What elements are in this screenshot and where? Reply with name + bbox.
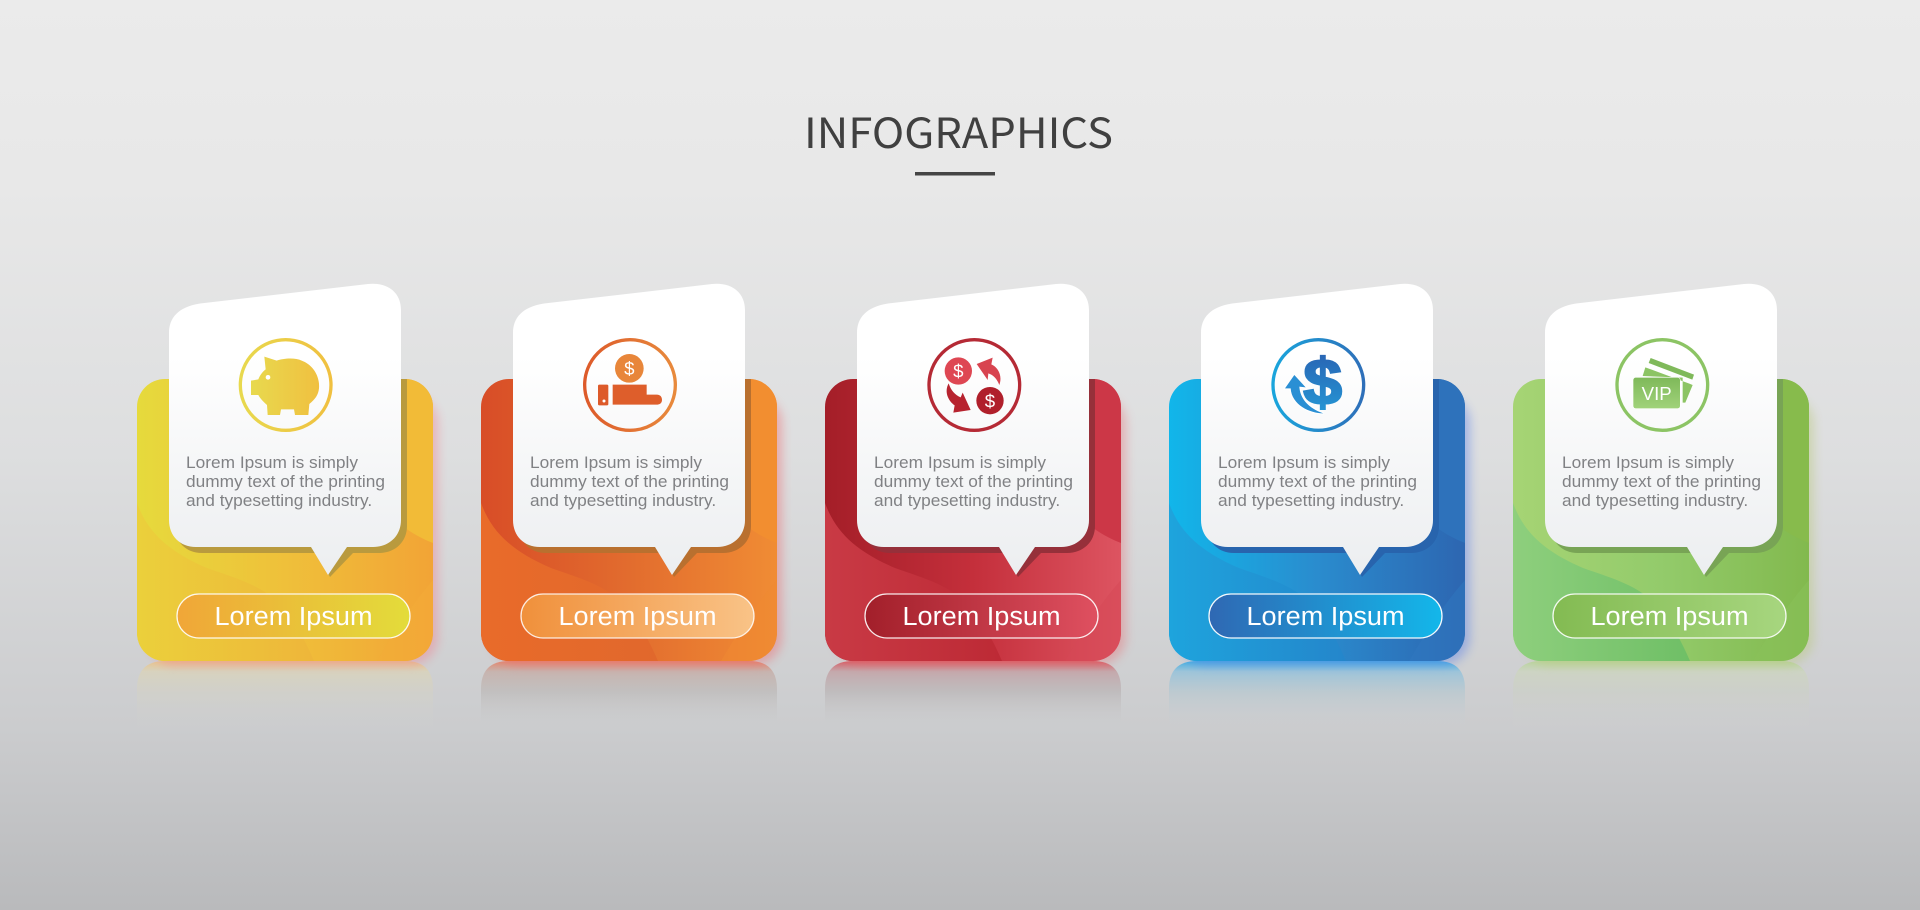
white speech card — [513, 284, 745, 575]
icon: currency exchange: $ — [953, 361, 964, 382]
icon: currency exchange — [929, 340, 1020, 430]
description text: and typesetting industry. — [1562, 492, 1748, 510]
label pill: Lorem Ipsum — [1590, 603, 1748, 631]
label pill: Lorem Ipsum — [558, 603, 716, 631]
description text: Lorem Ipsum is simply — [1218, 454, 1391, 472]
icon: piggy bank — [240, 340, 331, 430]
icon: hand holding coin — [585, 340, 675, 430]
label pill — [1553, 594, 1786, 638]
card glow — [491, 395, 782, 665]
title: INFOGRAPHICS — [804, 100, 1113, 160]
coloured base card — [137, 379, 433, 661]
label pill — [177, 594, 410, 638]
description text: and typesetting industry. — [530, 492, 716, 510]
description text: dummy text of the printing — [1218, 473, 1417, 491]
label pill — [1209, 594, 1442, 638]
reflection — [137, 661, 433, 731]
label pill: Lorem Ipsum — [214, 603, 372, 631]
reflection — [1513, 661, 1809, 731]
white speech card — [857, 284, 1089, 575]
coloured base card — [825, 379, 1121, 661]
description text: dummy text of the printing — [186, 473, 385, 491]
white speech card — [169, 284, 401, 575]
white speech card — [1201, 284, 1433, 575]
description text: Lorem Ipsum is simply — [1562, 454, 1735, 472]
description text: dummy text of the printing — [874, 473, 1073, 491]
description text: and typesetting industry. — [1218, 492, 1404, 510]
description text: and typesetting industry. — [874, 492, 1060, 510]
reflection — [1169, 661, 1465, 731]
coloured base card — [481, 379, 777, 661]
description text: and typesetting industry. — [186, 492, 372, 510]
icon: VIP cards — [1617, 340, 1708, 430]
panel: step 3 red — [825, 284, 1126, 731]
card glow — [147, 395, 438, 665]
label pill — [521, 594, 754, 638]
description text: dummy text of the printing — [530, 473, 729, 491]
white speech card — [1545, 284, 1777, 575]
label pill: Lorem Ipsum — [1246, 603, 1404, 631]
coloured base card — [1169, 379, 1465, 661]
description text: dummy text of the printing — [1562, 473, 1761, 491]
panel: step 5 green — [1513, 284, 1814, 731]
reflection — [825, 661, 1121, 731]
coloured base card — [1513, 379, 1809, 661]
description text: Lorem Ipsum is simply — [874, 454, 1047, 472]
label pill: Lorem Ipsum — [902, 603, 1060, 631]
icon: dollar with up arrow: $ — [1303, 346, 1342, 418]
description text: Lorem Ipsum is simply — [186, 454, 359, 472]
icon: VIP cards: VIP — [1642, 383, 1672, 404]
card glow — [1523, 395, 1814, 665]
icon: dollar with up arrow — [1273, 340, 1364, 430]
label pill — [865, 594, 1098, 638]
card glow — [835, 395, 1126, 665]
description text: Lorem Ipsum is simply — [530, 454, 703, 472]
card glow — [1179, 395, 1470, 665]
icon: currency exchange: $ — [985, 390, 996, 411]
panel: step 2 orange — [481, 284, 782, 731]
icon: hand holding coin: $ — [624, 358, 635, 379]
panel: step 4 blue — [1169, 284, 1470, 731]
reflection — [481, 661, 777, 731]
panel: step 1 yellow — [137, 284, 438, 731]
